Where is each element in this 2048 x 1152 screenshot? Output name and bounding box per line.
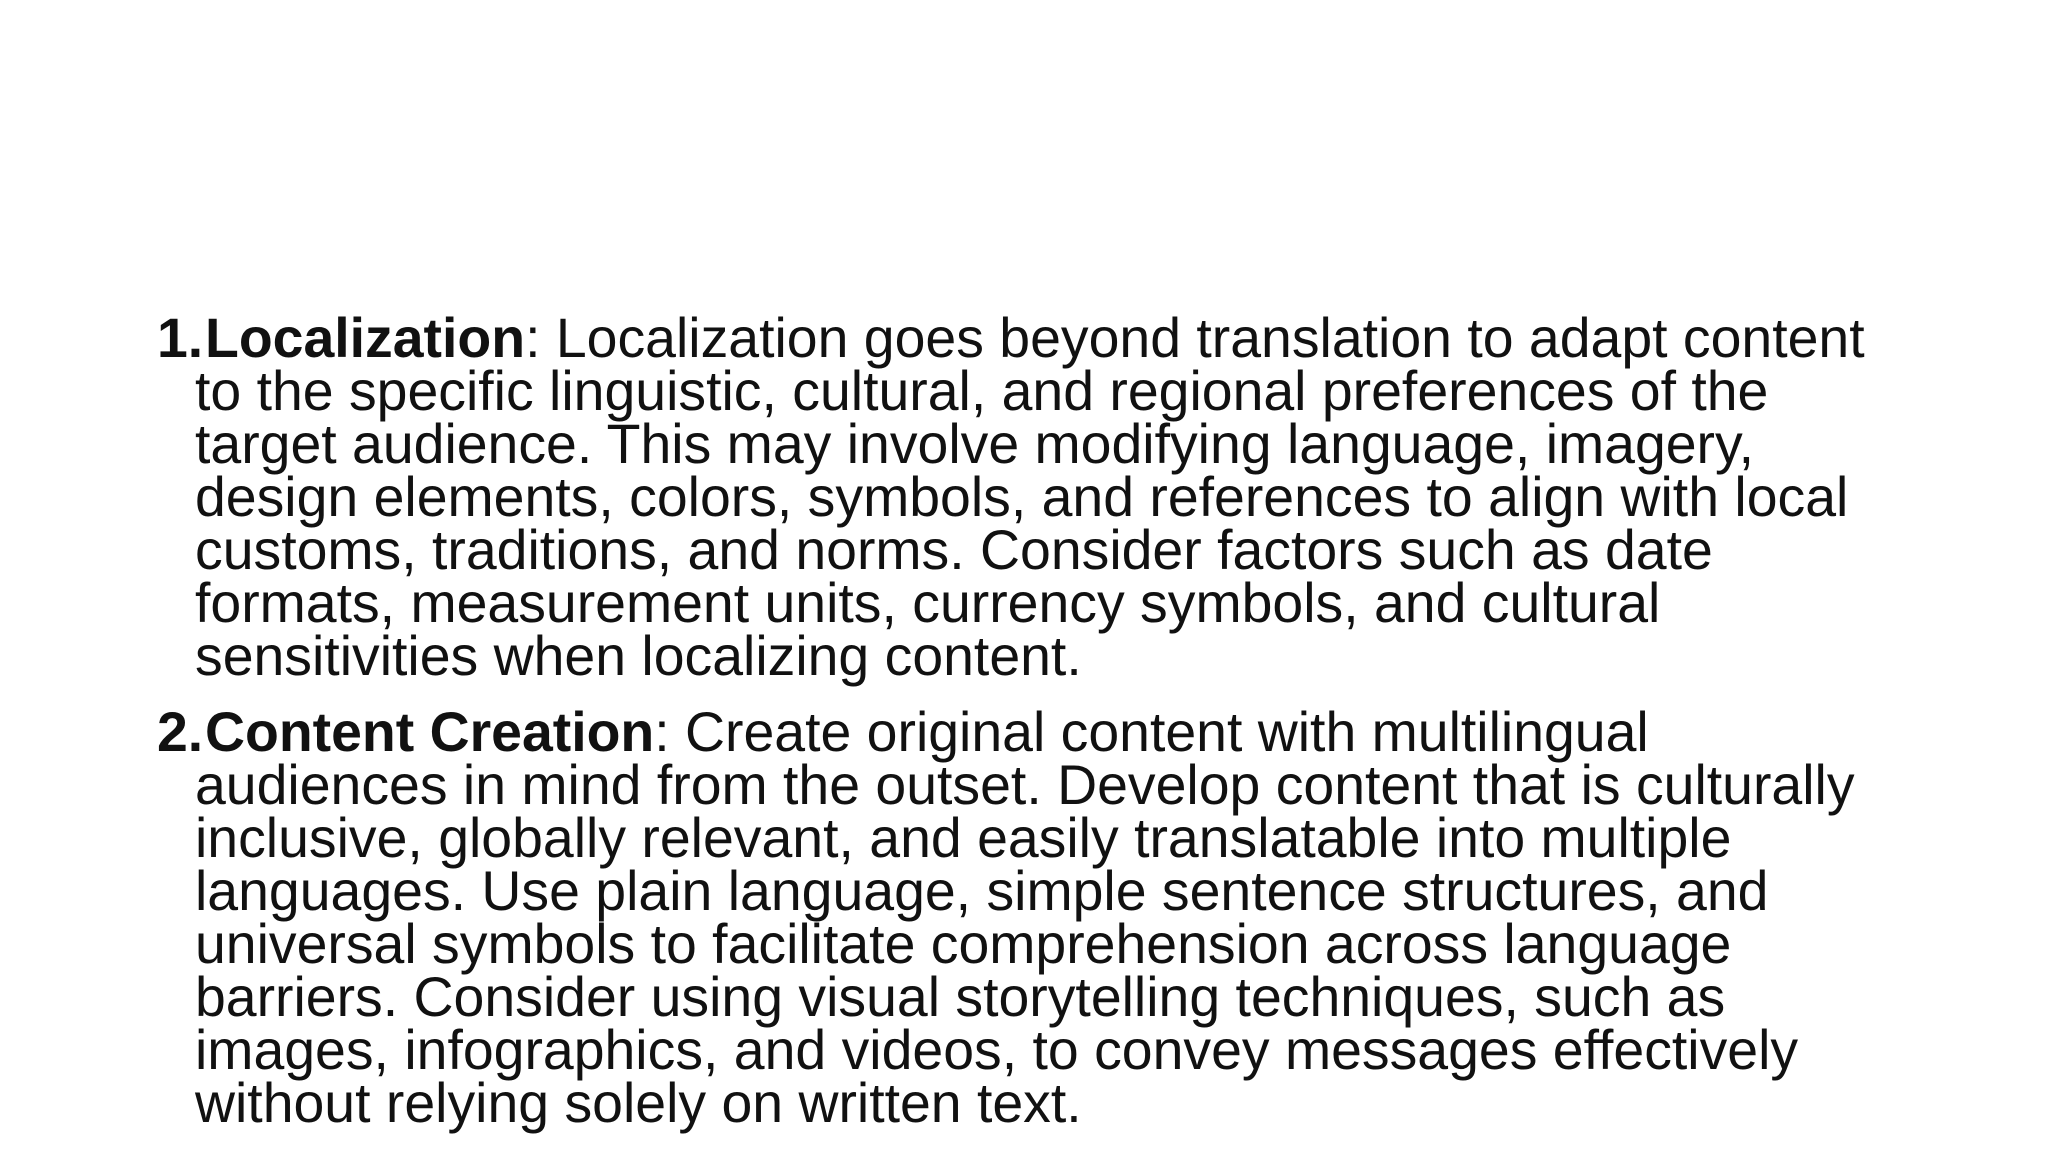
text: content creation paragraph: universal symbols to facilitate comprehension across language (195, 913, 1731, 975)
item 1: localization (157, 307, 1865, 687)
text: localization paragraph: target audience. This may involve modifying language, imagery, (195, 413, 1754, 475)
text: content creation paragraph: inclusive, globally relevant, and easily translatable into multiple (195, 807, 1731, 869)
text: content creation paragraph: images, infographics, and videos, to convey messages effectively (195, 1019, 1798, 1081)
text: content creation paragraph: without relying solely on written text. (195, 1072, 1082, 1134)
text: content creation paragraph: audiences in mind from the outset. Develop content that is culturally (195, 754, 1855, 816)
item 2: content creation (157, 701, 1855, 1134)
number 1: 1. (157, 307, 203, 369)
text: localization paragraph: Localization: Localization goes beyond translation to adapt content (205, 307, 1865, 369)
text: localization paragraph: design elements, colors, symbols, and references to align with local (195, 466, 1848, 528)
text: localization paragraph: customs, traditions, and norms. Consider factors such as date (195, 519, 1713, 581)
text: localization paragraph: formats, measurement units, currency symbols, and cultural (195, 572, 1660, 634)
text: content creation paragraph: barriers. Consider using visual storytelling techniques, such as (195, 966, 1725, 1028)
text: localization paragraph: sensitivities when localizing content. (195, 625, 1082, 687)
text: localization paragraph (195, 307, 1865, 687)
text: content creation paragraph: languages. Use plain language, simple sentence structures, and (195, 860, 1768, 922)
text: content creation paragraph (194, 701, 1855, 1134)
number 2: 2. (157, 701, 203, 763)
text: content creation paragraph: Content Creation: Create original content with multilingual (205, 701, 1649, 763)
text: localization paragraph: to the specific linguistic, cultural, and regional preferences of the (195, 360, 1768, 422)
